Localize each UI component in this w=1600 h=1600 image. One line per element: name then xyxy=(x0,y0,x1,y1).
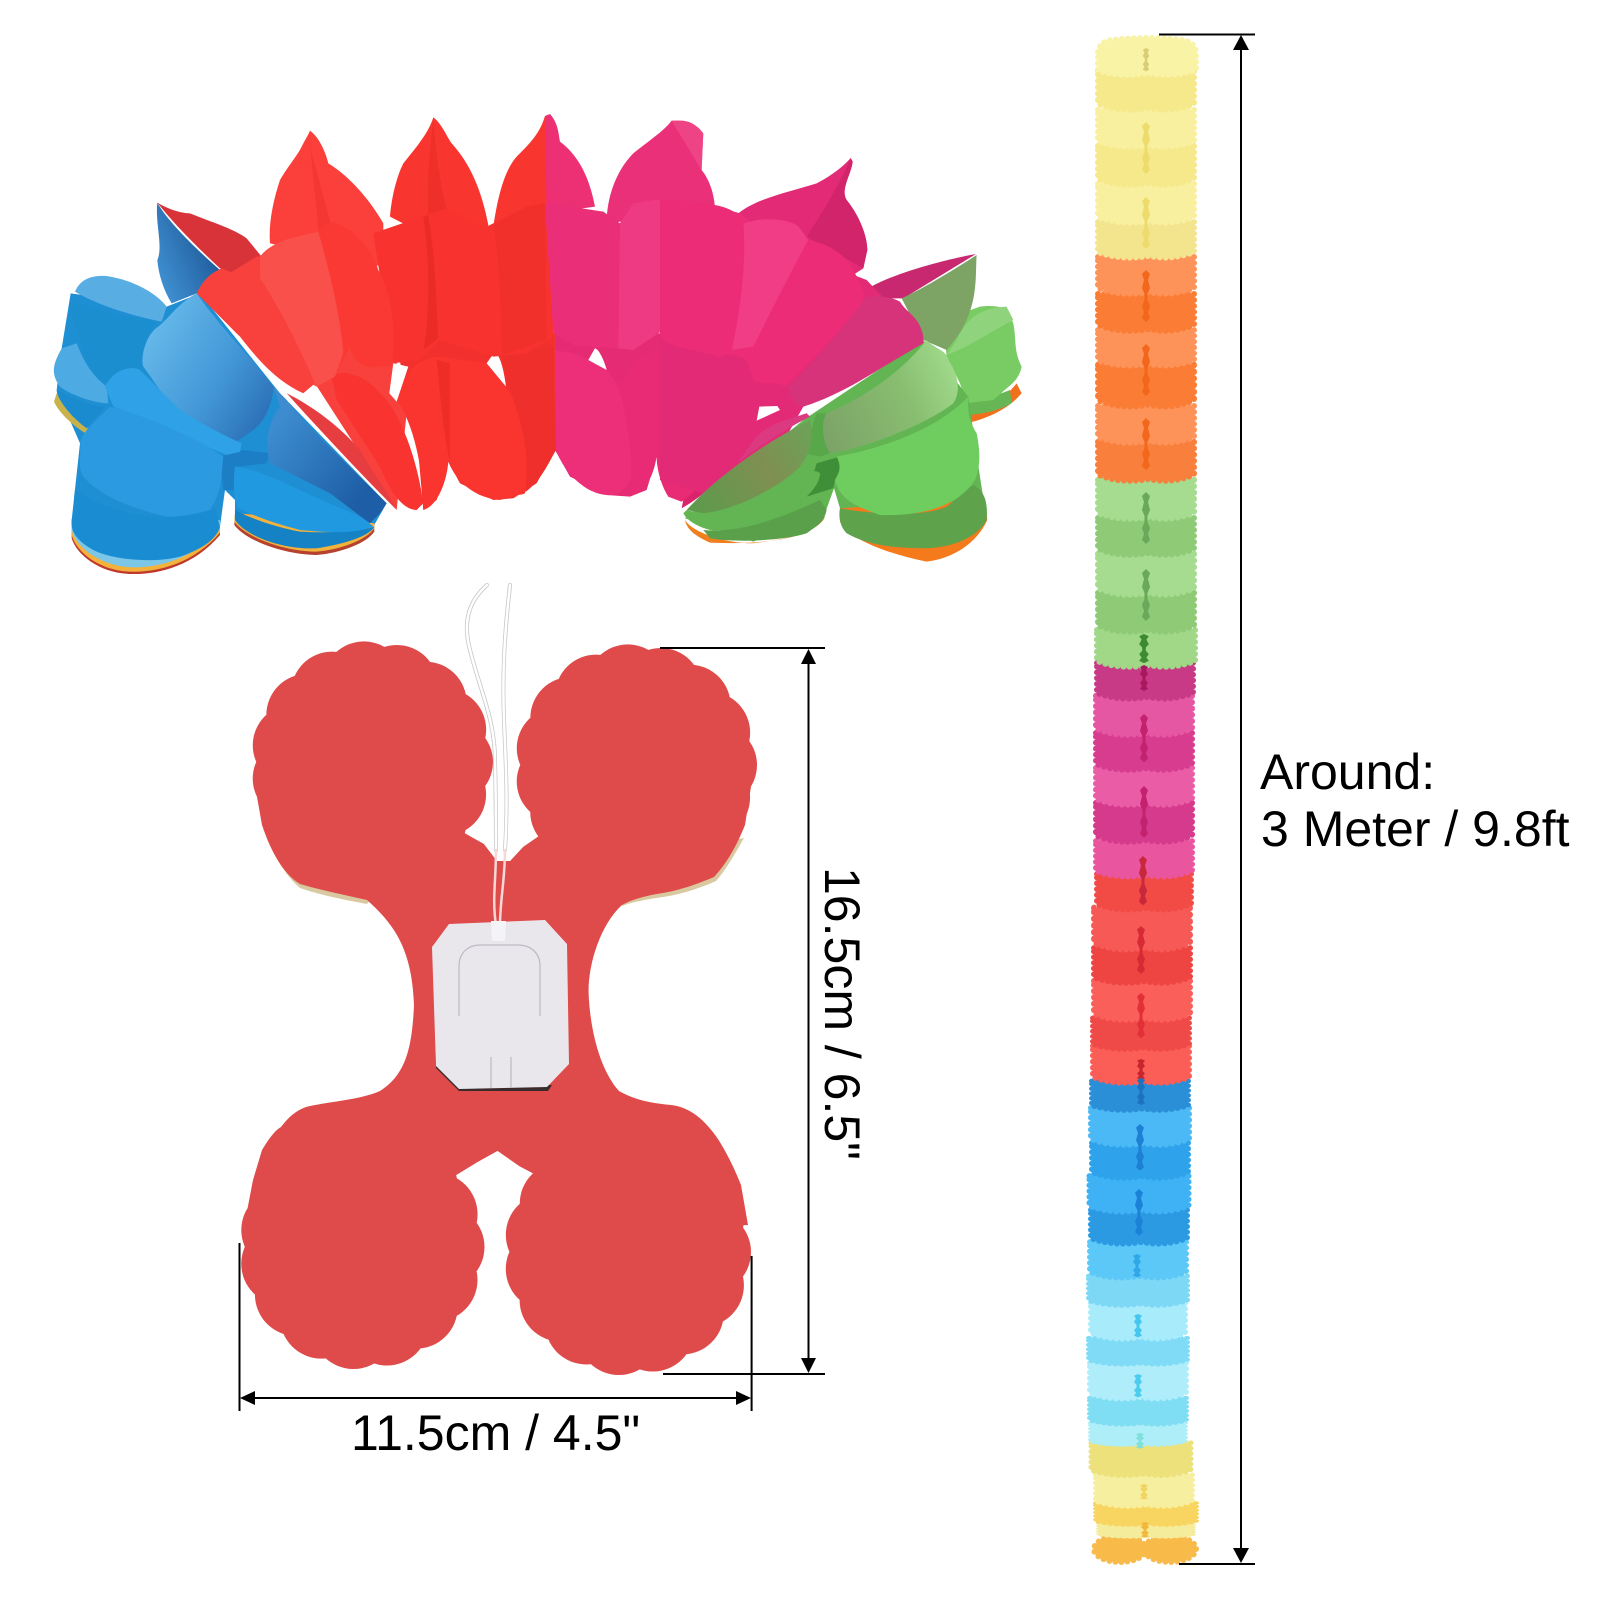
central scalloped band red to pink xyxy=(373,199,753,363)
dimension: height 16.5cm / 6.5": 16.5cm / 6.5" xyxy=(814,867,870,1160)
red segments xyxy=(1093,874,1191,1083)
magenta segments xyxy=(1096,663,1193,877)
main pink section at right xyxy=(660,200,923,507)
large red flap at left of band xyxy=(260,223,394,387)
length label: Around: xyxy=(1260,744,1435,800)
see-through gaps between lobes xyxy=(389,348,713,402)
bottom yellow and orange segments xyxy=(1092,1443,1196,1562)
far left stacked blue column xyxy=(54,276,387,560)
dimension: total length xyxy=(1159,34,1255,1564)
center slit marks along the strip xyxy=(1133,48,1150,1538)
photo: expanded garland arch xyxy=(54,114,1022,574)
length label xyxy=(1260,744,1570,857)
orange segments xyxy=(1098,257,1194,481)
photo: single flat garland piece xyxy=(243,585,752,1334)
yellow segments xyxy=(1098,38,1196,258)
dimension: width 11.5cm / 4.5" xyxy=(240,1243,752,1461)
dimension: width 11.5cm / 4.5": 11.5cm / 4.5" xyxy=(351,1405,640,1461)
front right pink flap and green lobes xyxy=(683,296,987,562)
far right stacked green column xyxy=(868,254,1022,423)
photo: hanging garland strip, fully extended xyxy=(1089,38,1196,1562)
paper underside tan edge xyxy=(268,838,744,906)
white cardboard hanging tag xyxy=(432,920,569,1091)
light blue segments xyxy=(1089,1242,1187,1445)
strings crossing the gap and body xyxy=(467,585,510,925)
back pink lobe at right xyxy=(738,158,867,313)
length label: 3 Meter / 9.8ft xyxy=(1261,801,1570,857)
hanging strings above the piece xyxy=(467,585,510,850)
lower row of red and pink lobes xyxy=(332,333,757,510)
blue segments xyxy=(1090,1081,1189,1244)
scalloped lobes and center body xyxy=(243,682,752,1334)
back row of red and pink lobes xyxy=(270,114,715,267)
notch gaps between lobes xyxy=(476,640,523,1270)
dimension: height 16.5cm / 6.5" xyxy=(660,648,870,1374)
front left blue lobes and red edge xyxy=(71,268,397,574)
green segments xyxy=(1097,480,1195,667)
back left blue and red fold xyxy=(157,203,407,510)
